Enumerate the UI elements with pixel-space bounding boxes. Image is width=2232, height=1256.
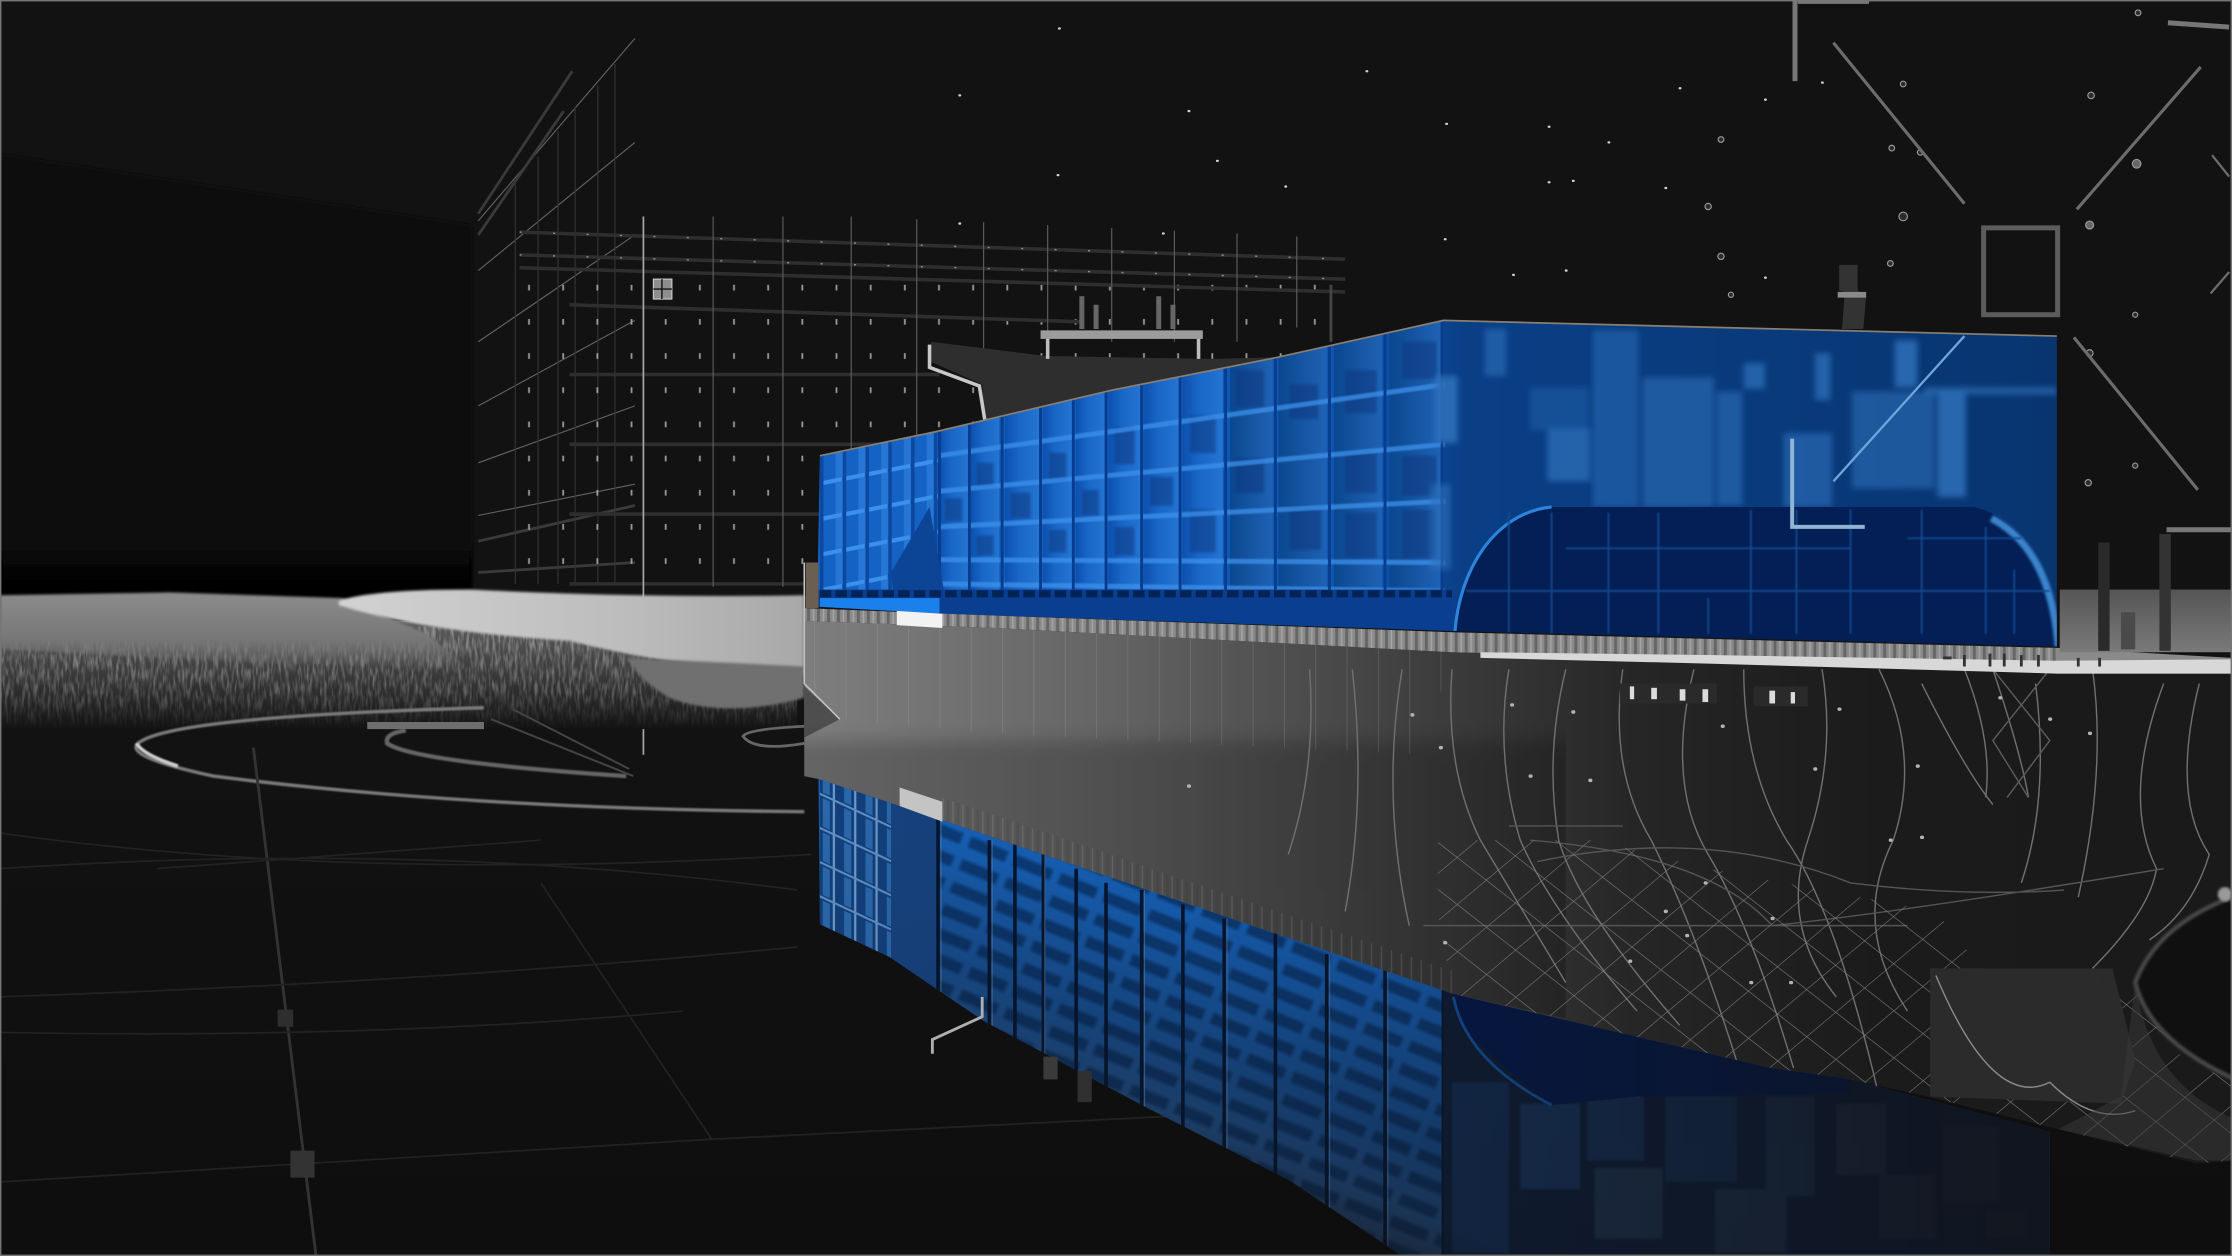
hull portholes (1620, 684, 1808, 706)
icon: small window marker (653, 279, 672, 299)
left grey shore band (0, 592, 470, 669)
hull reflection shade (804, 736, 1566, 1018)
blue container stacks (811, 316, 2064, 652)
base cell strip (817, 590, 1452, 632)
top right targeting marks (1795, 0, 2232, 530)
icon: framing square (1984, 228, 2058, 315)
hull bow dark block (1930, 968, 2135, 1104)
forward blue diagonal and L bracket overlay (1792, 336, 1964, 527)
hull wire frame curves (1288, 669, 2209, 1097)
reflected navy ribbon (1453, 994, 1851, 1105)
container row bars (939, 384, 1445, 591)
stern bay small stacks (820, 427, 939, 598)
hull reflected deck noise (942, 797, 1453, 994)
container top rust edge (820, 320, 2057, 456)
floor lines and orbit rings (0, 708, 1281, 1256)
shore reflection (626, 658, 804, 708)
starfield particles (959, 10, 2141, 486)
blue container reflection (811, 769, 2064, 1256)
wireframe warehouse front grid (520, 216, 1345, 755)
reflected forward hold blocks (1443, 990, 2055, 1256)
hull pinch (804, 686, 840, 738)
deck strip (804, 562, 2232, 719)
shoreline (0, 590, 804, 729)
ship bridge superstructure (930, 265, 1866, 424)
bow dark form with light rim (2058, 887, 2232, 1161)
dark triangular blue fin (892, 507, 944, 590)
column separators (939, 320, 1442, 634)
reflected bridge rail (932, 997, 982, 1054)
reflected column lines (938, 812, 1443, 1256)
dark left wall (0, 154, 473, 598)
reflected slats (938, 812, 1451, 1256)
reflected dark fin (891, 803, 938, 990)
wireframe warehouse perspective wall (478, 38, 635, 584)
hull side plating ribs (804, 621, 1452, 755)
darker cell shading across the stacks (945, 342, 1436, 558)
forward dark arched hold (1455, 507, 2060, 648)
hull lattice mesh (1423, 826, 2232, 1168)
right side equipment behind ship (2060, 534, 2232, 652)
bright shore lobe (339, 590, 804, 675)
hold machinery detail (1466, 510, 2050, 634)
reflected stern bay (820, 776, 891, 961)
grass underlay (0, 621, 797, 729)
ship hull (769, 621, 2232, 1163)
water floor (0, 712, 2232, 1256)
container columns (939, 320, 1441, 601)
forward bay blurred containers (1431, 329, 2057, 570)
aft mast (1839, 265, 1866, 329)
grass noise (0, 627, 797, 729)
reflected superstructure smudges (1043, 1057, 1058, 1079)
hull rivets (1189, 698, 2090, 983)
reflected bright deck patch (900, 787, 942, 822)
